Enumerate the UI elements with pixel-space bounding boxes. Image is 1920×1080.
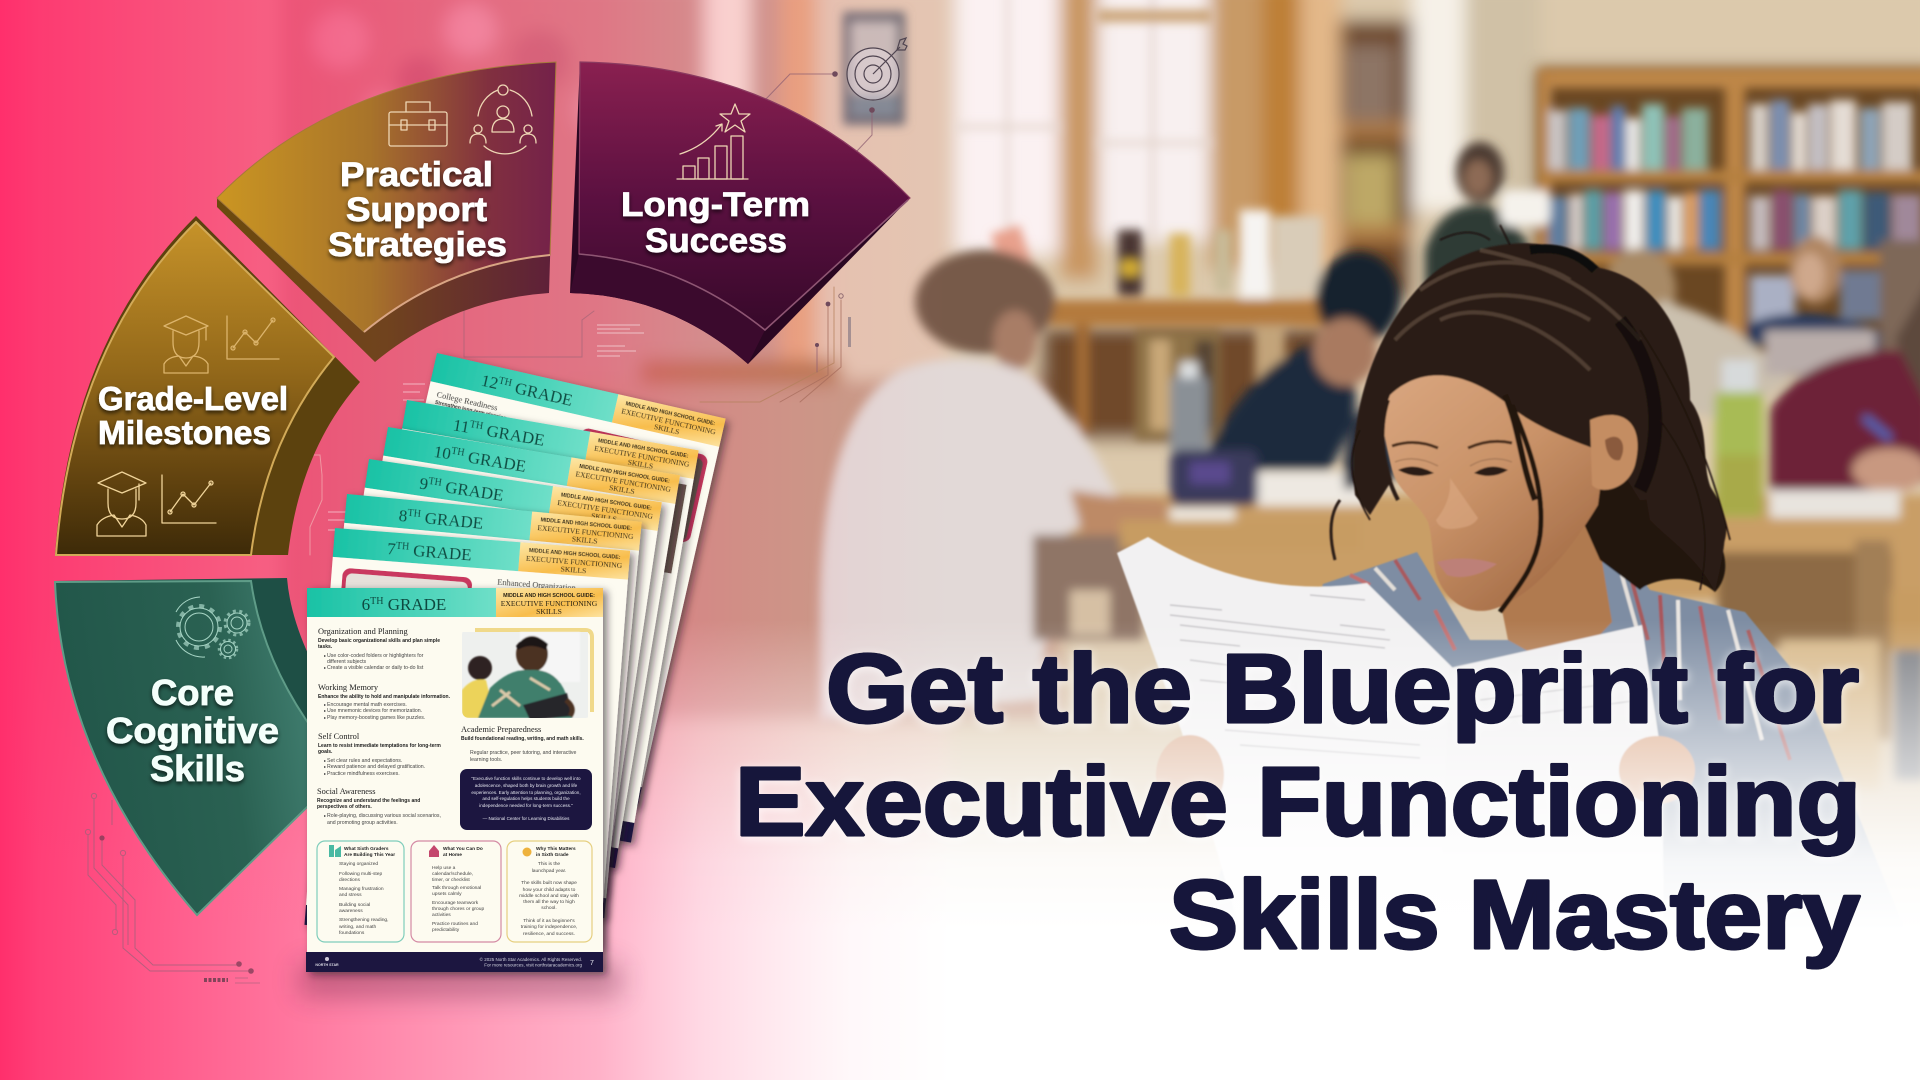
icon: line chart top <box>227 316 279 359</box>
card: what you can do at home <box>411 841 501 942</box>
label: Grade-Level Milestones <box>98 380 288 451</box>
card: what you can do at home: What You Can Do <box>443 846 483 852</box>
page: 12th grade: SKILLS <box>653 422 680 437</box>
callout: quote box: adolescence, shaped both by brain growth and life <box>475 783 578 788</box>
segment: Core Cognitive Skills <box>55 578 345 915</box>
page: 9th grade <box>311 459 662 896</box>
page footer: NORTH STAR <box>315 963 339 967</box>
card: why this matters in sixth grade: The skills built now shape <box>521 880 577 886</box>
page text: left column: Use mnemonic devices for memorization. <box>327 708 422 714</box>
page: 11th grade: MIDDLE AND HIGH SCHOOL GUIDE: <box>597 438 689 460</box>
page: 7th grade: Enhanced Organization <box>497 578 577 593</box>
card: what sixth graders are building: What Sixth Graders <box>344 846 389 852</box>
page photo: boy with tablet <box>462 630 592 720</box>
page: 12th grade: EXECUTIVE FUNCTIONING <box>621 406 717 437</box>
callout: quote box: "Executive function skills continue to develop well into <box>471 776 581 781</box>
page: 9th grade: TH <box>428 476 443 489</box>
page text: academic preparedness: Regular practice, peer tutoring, and interactive <box>470 750 577 756</box>
page: 10th grade: MIDDLE AND HIGH SCHOOL GUIDE: <box>579 464 670 485</box>
card: why this matters in sixth grade: launchpad year. <box>532 868 566 874</box>
page text: left column: Practice mindfulness exercises. <box>327 771 400 777</box>
page text: left column: and promoting group activities. <box>327 820 398 826</box>
card: what you can do at home: through chores or group <box>432 906 484 912</box>
page: 10th grade: 10 <box>433 442 452 463</box>
page: 7th grade: TH <box>396 541 410 553</box>
icon: target with arrow <box>847 38 907 100</box>
page text: left column: Self Control <box>318 732 360 741</box>
page: 10th grade: SKILLS <box>608 483 635 496</box>
card: what sixth graders are building: writing, and math <box>339 924 377 930</box>
soft shadow under document fan <box>300 965 620 995</box>
label: Core Cognitive Skills: Core <box>151 672 234 713</box>
page footer <box>306 952 603 972</box>
page: 10th grade: TH <box>450 446 465 459</box>
page: 11th grade: GRADE <box>481 420 546 450</box>
page: 12th grade: TH <box>498 376 513 389</box>
page: 12th grade: 12 <box>479 371 500 393</box>
label: Practical Support Strategies: Strategies <box>328 226 507 264</box>
page text: left column: different subjects <box>327 659 367 665</box>
page: 6th grade front: MIDDLE AND HIGH SCHOOL GUIDE: <box>503 593 595 599</box>
page text: left column: Encourage mental math exercises. <box>327 702 407 708</box>
page: 12th grade: GRADE <box>509 377 574 410</box>
page: 9th grade: MIDDLE AND HIGH SCHOOL GUIDE: <box>560 492 652 512</box>
card: what sixth graders are building: directions <box>339 877 360 883</box>
card: what sixth graders are building <box>317 841 404 942</box>
icon: briefcase <box>389 102 447 146</box>
card: why this matters in sixth grade: school. <box>541 905 557 911</box>
page: 11th grade: SKILLS <box>627 458 654 471</box>
page text: academic preparedness <box>461 725 584 763</box>
page: 7th grade: GRADE <box>408 541 472 565</box>
card: what you can do at home: calendar/schedule, <box>432 871 473 877</box>
page: 12th grade: MIDDLE AND HIGH SCHOOL GUIDE: <box>625 401 716 427</box>
callout: quote box <box>460 769 592 830</box>
page footer: 7 <box>590 960 594 967</box>
card: what you can do at home: timer, or checklist <box>432 877 470 883</box>
title: Get the Blueprint for Executive Functioning Skills Mastery: Skills Mastery <box>1169 860 1860 969</box>
label: Core Cognitive Skills <box>106 672 279 789</box>
pink left-to-right gradient overlay <box>0 0 960 1080</box>
page: 6th grade front: EXECUTIVE FUNCTIONING <box>501 599 598 608</box>
card: what sixth graders are building: and stress <box>339 892 362 898</box>
label: Grade-Level Milestones: Milestones <box>98 414 271 451</box>
page: 6th grade front: SKILLS <box>536 607 562 616</box>
icon: gears <box>176 597 249 658</box>
label: Core Cognitive Skills: Cognitive <box>106 710 279 751</box>
card: what you can do at home: Talk through emotional <box>432 885 481 891</box>
page: 8th grade: MIDDLE AND HIGH SCHOOL GUIDE: <box>540 517 632 532</box>
page footer: © 2025 North Star Academics. All Rights Reserved. <box>480 956 582 962</box>
label: Practical Support Strategies <box>328 156 507 264</box>
page: 9th grade: 9 <box>418 474 429 494</box>
card: what you can do at home: Encourage teamwork <box>432 900 479 906</box>
connector lines and target icon <box>291 38 907 555</box>
icon: line chart bottom <box>162 475 216 523</box>
card: what sixth graders are building: Are Building This Year <box>344 852 395 858</box>
card: what sixth graders are building: Following multi-step <box>339 871 382 877</box>
page: 9th grade: GRADE <box>440 477 505 505</box>
label: Long-Term Success: Long-Term <box>621 186 810 224</box>
page: 7th grade: MIDDLE AND HIGH SCHOOL GUIDE: <box>529 548 621 561</box>
page: 12th grade: Strengthen long-term planning. <box>434 400 509 422</box>
page text: left column: Working Memory <box>318 683 379 692</box>
title: Get the Blueprint for Executive Functioning Skills Mastery: Executive Functioning <box>735 747 1861 856</box>
page: 6th grade front <box>306 588 603 972</box>
page: 12th grade <box>349 353 726 807</box>
label: Long-Term Success: Success <box>645 222 787 260</box>
page: 8th grade: GRADE <box>420 508 484 533</box>
page text: left column: Organization and Planning <box>318 627 408 636</box>
card: what you can do at home: predictability <box>432 927 460 933</box>
card: what sixth graders are building: Strengthening reading, <box>339 917 388 923</box>
card: why this matters in sixth grade: in Sixth Grade <box>536 852 569 858</box>
page text: left column: tasks. <box>318 644 333 650</box>
page text: left column: Social Awareness <box>317 787 376 796</box>
page text: left column: goals. <box>318 749 333 755</box>
page text: academic preparedness: learning tools. <box>470 757 502 763</box>
title: Get the Blueprint for Executive Functioning Skills Mastery <box>735 634 1861 969</box>
card: why this matters in sixth grade: middle school and stay with <box>519 893 579 899</box>
page: 6th grade front: TH <box>370 596 384 607</box>
title: Get the Blueprint for Executive Functioning Skills Mastery: Get the Blueprint for <box>826 634 1859 743</box>
callout: quote box: and self-regulation helps students build the <box>482 796 570 801</box>
card: why this matters in sixth grade: resilience, and success. <box>523 931 575 937</box>
card: why this matters in sixth grade: Why This Matters <box>536 846 576 852</box>
icon: graduate bottom <box>97 472 146 536</box>
page: 8th grade: SKILLS <box>571 534 598 546</box>
page text: left column: perspectives of others. <box>317 804 372 810</box>
page: 7th grade: EXECUTIVE FUNCTIONING <box>526 554 623 570</box>
card: why this matters in sixth grade: them all the way to high <box>523 899 575 905</box>
card: why this matters in sixth grade: This is the <box>538 861 560 867</box>
page: 8th grade: 8 <box>398 506 408 526</box>
page: 8th grade: TH <box>407 508 421 520</box>
label: Practical Support Strategies: Practical <box>340 156 493 194</box>
card: why this matters in sixth grade: Think of it as beginner's <box>523 918 575 924</box>
card: what sixth graders are building: Building social <box>339 902 370 908</box>
icon: graduate top <box>164 316 208 373</box>
page text: left column: Learn to resist immediate temptations for long-term <box>318 743 441 749</box>
page text: academic preparedness: Build foundational reading, writing, and math skills. <box>461 736 584 742</box>
label: Practical Support Strategies: Support <box>346 191 487 229</box>
page: 11th grade: 11 <box>452 415 471 437</box>
page text: academic preparedness: Academic Preparedness <box>461 725 541 734</box>
page footer: For more resources, visit northstaracademics.org <box>484 962 582 968</box>
card: what sixth graders are building: awareness <box>339 908 363 914</box>
page: 6th grade front: GRADE <box>384 595 446 614</box>
label: Core Cognitive Skills: Skills <box>150 748 245 789</box>
page: 10th grade: GRADE <box>462 447 528 476</box>
label: Long-Term Success <box>621 186 810 260</box>
callout: quote box: — National Center for Learning Disabilities <box>483 816 570 821</box>
page: 8th grade <box>310 494 642 918</box>
segment: Grade-Level Milestones <box>55 216 360 555</box>
document fan: grade-level guide pages <box>304 353 726 972</box>
white fade at the bottom of the photo <box>0 620 1920 1080</box>
page: 11th grade <box>339 400 699 843</box>
page: 11th grade: EXECUTIVE FUNCTIONING <box>594 444 691 469</box>
card: what you can do at home: activities <box>432 912 451 918</box>
page: 12th grade: College Readiness <box>436 390 498 413</box>
callout: quote box: independence needed for long-term success." <box>479 803 573 808</box>
page: 8th grade: EXECUTIVE FUNCTIONING <box>537 523 634 541</box>
page: 9th grade: EXECUTIVE FUNCTIONING <box>557 498 654 521</box>
page text: left column: Enhance the ability to hold and manipulate information. <box>318 694 451 700</box>
page: 7th grade <box>304 528 630 948</box>
page: 11th grade: TH <box>469 419 484 432</box>
card: what you can do at home: Practice routines and <box>432 921 478 927</box>
card: what sixth graders are building: foundations <box>339 930 365 936</box>
page text: left column: Play memory-boosting games like puzzles. <box>327 715 425 721</box>
page: 10th grade <box>323 427 680 868</box>
page text: left column: Set clear rules and expectations. <box>327 758 402 764</box>
page text: left column: Use color-coded folders or highlighters for <box>327 653 424 659</box>
page text: left column: Create a visible calendar or daily to-do list <box>327 665 424 671</box>
card: what you can do at home: at Home <box>443 852 462 858</box>
page text: left column: Develop basic organizational skills and plan simple <box>318 638 440 644</box>
page text: left column <box>317 627 451 826</box>
card: what sixth graders are building: Staying organized <box>339 861 378 867</box>
callout: quote box: experiences. Early attention to planning, organization, <box>471 790 581 795</box>
page: 6th grade front: 6 <box>362 595 370 614</box>
circuit lines at bottom left <box>85 793 260 983</box>
card: what you can do at home: Help use a <box>432 865 456 871</box>
page text: left column: Reward patience and delayed gratification. <box>327 764 425 770</box>
page text: left column: Role-playing, discussing various social scenarios, <box>327 813 441 819</box>
card: why this matters in sixth grade <box>507 841 592 942</box>
page: 7th grade: 7 <box>387 539 396 559</box>
card: why this matters in sixth grade: how your child adapts to <box>523 887 576 893</box>
page: 10th grade: EXECUTIVE FUNCTIONING <box>575 469 672 494</box>
card: what sixth graders are building: Managing frustration <box>339 886 384 892</box>
icon: rising bars with star <box>677 104 750 179</box>
segment: Long-Term Success <box>570 62 910 364</box>
card: what you can do at home: upsets calmly <box>432 891 462 897</box>
page text: left column: Recognize and understand the feelings and <box>317 798 420 804</box>
icon: group of people in circle <box>470 85 536 154</box>
label: Grade-Level Milestones: Grade-Level <box>98 380 288 417</box>
page: 7th grade: SKILLS <box>560 564 587 575</box>
card: why this matters in sixth grade: training for independence, <box>521 924 577 930</box>
segment: Practical Support Strategies <box>217 62 556 362</box>
page: 9th grade: SKILLS <box>591 511 617 524</box>
